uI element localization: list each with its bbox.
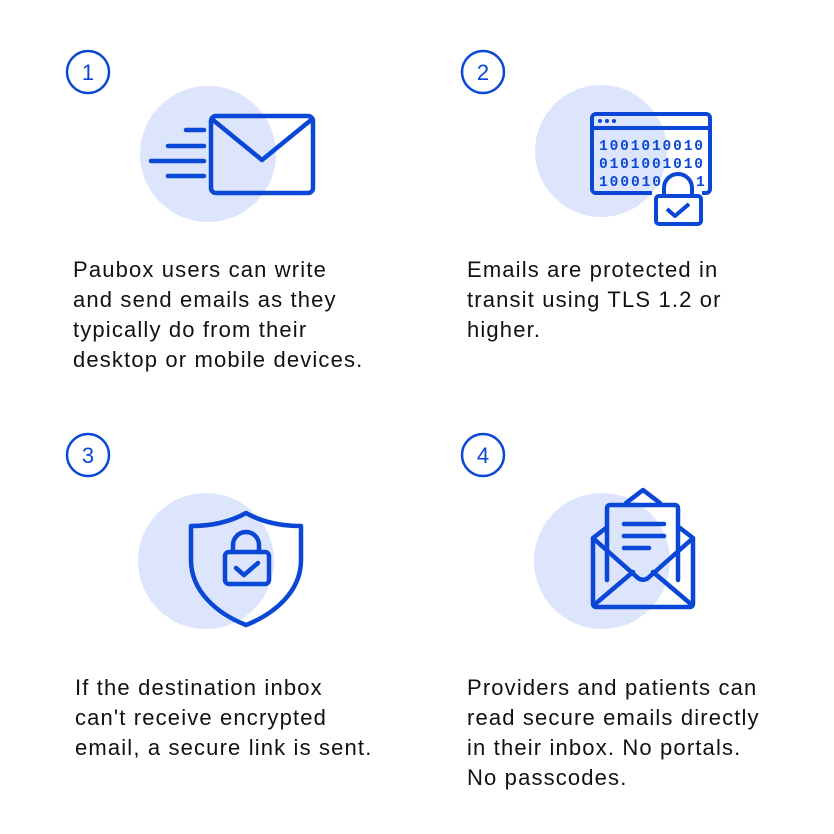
icon: binary window with lock: 1 xyxy=(696,175,705,191)
number 3 xyxy=(67,434,109,476)
text: panel 4: Providers and patients can xyxy=(467,675,757,700)
text: panel 1: Paubox users can write xyxy=(73,257,327,282)
panel 4 graphics xyxy=(462,434,693,629)
icon: binary window with lock: 100010 xyxy=(599,175,661,191)
text: panel 2: Emails are protected in xyxy=(467,257,718,282)
panel 3 graphics xyxy=(67,434,301,629)
text: panel 2: higher. xyxy=(467,317,541,342)
number 1: 1 xyxy=(82,60,94,85)
icon: open envelope with letter xyxy=(593,490,693,607)
number 2 xyxy=(462,51,504,93)
text: panel 2: transit using TLS 1.2 or xyxy=(467,287,722,312)
text: panel 3 xyxy=(75,675,372,760)
text: panel 4: read secure emails directly xyxy=(467,705,760,730)
text: panel 3: can't receive encrypted xyxy=(75,705,327,730)
text: panel 1: desktop or mobile devices. xyxy=(73,347,363,372)
number 4: 4 xyxy=(477,443,489,468)
icon: binary window with lock: 1001010010 xyxy=(599,139,703,155)
text: panel 1: typically do from their xyxy=(73,317,307,342)
text: panel 1 xyxy=(73,257,363,372)
icon: sending envelope xyxy=(151,116,313,193)
icon: binary window with lock: 0101001010 xyxy=(599,157,703,173)
text: panel 4: in their inbox. No portals. xyxy=(467,735,741,760)
text: panel 1: and send emails as they xyxy=(73,287,337,312)
number 1 xyxy=(67,51,109,93)
text: panel 2 xyxy=(467,257,722,342)
panel 1 graphics xyxy=(67,51,313,222)
panel 2 graphics xyxy=(462,51,710,224)
number 3: 3 xyxy=(82,443,94,468)
text: panel 3: email, a secure link is sent. xyxy=(75,735,372,760)
number 4 xyxy=(462,434,504,476)
text: panel 4: No passcodes. xyxy=(467,765,627,790)
text: panel 3: If the destination inbox xyxy=(75,675,323,700)
number 2: 2 xyxy=(477,60,489,85)
text: panel 4 xyxy=(467,675,760,790)
icon: shield with lock xyxy=(191,513,301,625)
icon: binary window with lock xyxy=(592,114,710,224)
